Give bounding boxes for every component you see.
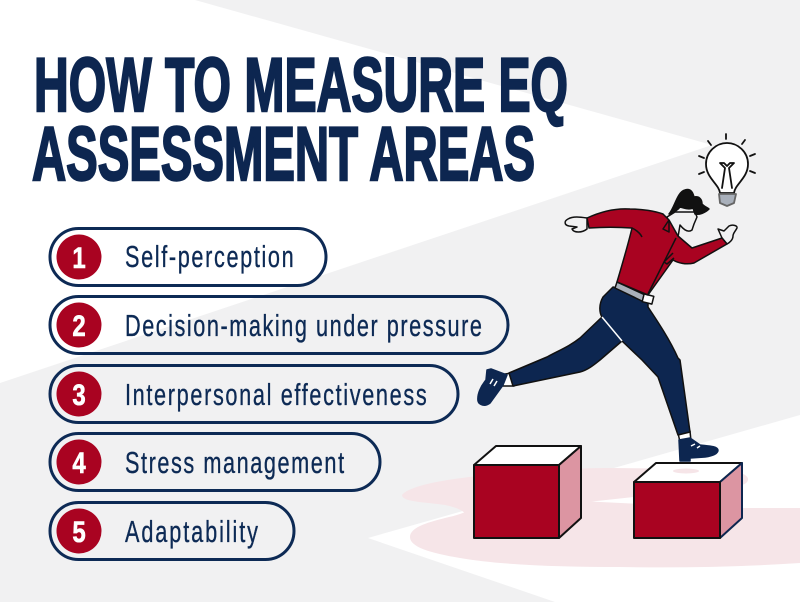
list item 5 [50, 502, 294, 560]
list item 2 [50, 296, 508, 354]
list item 2: 2 [72, 308, 86, 343]
person: hair [669, 190, 709, 214]
person: right hand [718, 225, 737, 244]
icon: light bulb [699, 134, 755, 206]
list item 3 [50, 366, 458, 422]
list item 5: 5 [72, 514, 86, 549]
person: front shoe [679, 438, 718, 461]
list item 2: Decision-making under pressure [125, 308, 482, 343]
person: belt [615, 282, 645, 302]
list item 4: Stress management [125, 445, 345, 480]
icon: left box [474, 446, 581, 538]
title [32, 43, 568, 197]
list item 4 [50, 434, 380, 490]
person: shirt [587, 209, 727, 295]
person: back shoe [478, 369, 507, 405]
list item 4: 4 [72, 445, 86, 480]
list item 1: 1 [72, 240, 86, 275]
person: trousers [509, 287, 690, 435]
list item 3: Interpersonal effectiveness [125, 377, 427, 412]
person: neck and face [667, 212, 697, 237]
list item 3: 3 [72, 377, 86, 412]
person: socks [502, 373, 514, 386]
person: left hand [565, 217, 587, 232]
icon: running person [478, 190, 737, 461]
list item 5: Adaptability [125, 514, 259, 549]
list item 1 [50, 228, 326, 286]
icon: right box [634, 463, 742, 538]
pink floor shapes [402, 468, 800, 567]
list item 1: Self-perception [125, 239, 294, 274]
